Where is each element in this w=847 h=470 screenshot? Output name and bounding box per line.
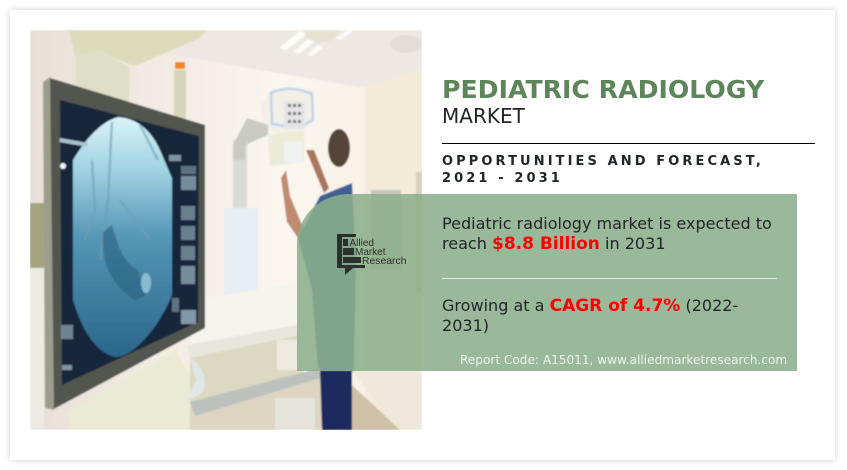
screen labels <box>59 138 181 370</box>
warning light <box>175 62 185 69</box>
person <box>281 129 356 430</box>
CAGR statement: 2031) <box>442 316 489 335</box>
window <box>224 208 258 298</box>
green info panel <box>297 194 797 371</box>
CAGR statement: Growing at a CAGR of 4.7% (2022- <box>442 296 738 316</box>
market size statement: reach $8.8 Billion in 2031 <box>442 234 666 254</box>
floor <box>190 372 322 430</box>
market size statement <box>442 214 772 254</box>
ceiling <box>130 30 422 88</box>
forecast heading: 2021 - 2031 <box>442 171 563 186</box>
x-ray vessels <box>85 122 158 260</box>
screen side panels <box>172 166 196 324</box>
panel divider <box>442 278 777 279</box>
wall cabinet <box>371 190 401 270</box>
warning pole <box>174 70 186 120</box>
monitor column <box>76 50 130 105</box>
bed <box>187 283 300 358</box>
subtitle: market: MARKET <box>442 104 525 128</box>
ceiling arm <box>69 30 207 66</box>
monitor side <box>43 77 54 410</box>
title: PEDIATRIC RADIOLOGY <box>442 75 764 104</box>
vertical rail <box>233 140 247 335</box>
wall <box>30 30 422 430</box>
logo: Allied Market Research: Allied <box>350 238 374 249</box>
logo: Allied Market Research <box>337 234 407 275</box>
forecast heading <box>442 154 764 186</box>
monitor stand <box>69 350 190 430</box>
logo: Allied Market Research: Market <box>355 247 386 258</box>
x-ray arm <box>233 118 268 160</box>
right wall <box>365 68 422 430</box>
x-ray head <box>260 88 314 135</box>
bright patch <box>141 273 151 293</box>
logo: Allied Market Research: Research <box>362 256 407 267</box>
report code: Report Code: A15011, www.alliedmarketresearch.com <box>460 353 787 367</box>
forecast heading: OPPORTUNITIES AND FORECAST, <box>442 154 764 169</box>
monitor screen <box>60 100 199 385</box>
monitor bezel <box>50 78 205 410</box>
lamp arm <box>303 30 342 44</box>
x-ray image <box>73 117 172 357</box>
photo: radiology room with x-ray monitor <box>30 30 422 430</box>
left wall stripe <box>30 203 44 268</box>
heart shadow <box>103 225 145 300</box>
market size statement: Pediatric radiology market is expected to <box>442 214 772 233</box>
door frame <box>416 172 422 292</box>
divider <box>442 143 815 144</box>
ceiling vent <box>390 35 422 53</box>
CAGR statement <box>442 296 738 335</box>
ceiling lamp <box>279 30 353 56</box>
